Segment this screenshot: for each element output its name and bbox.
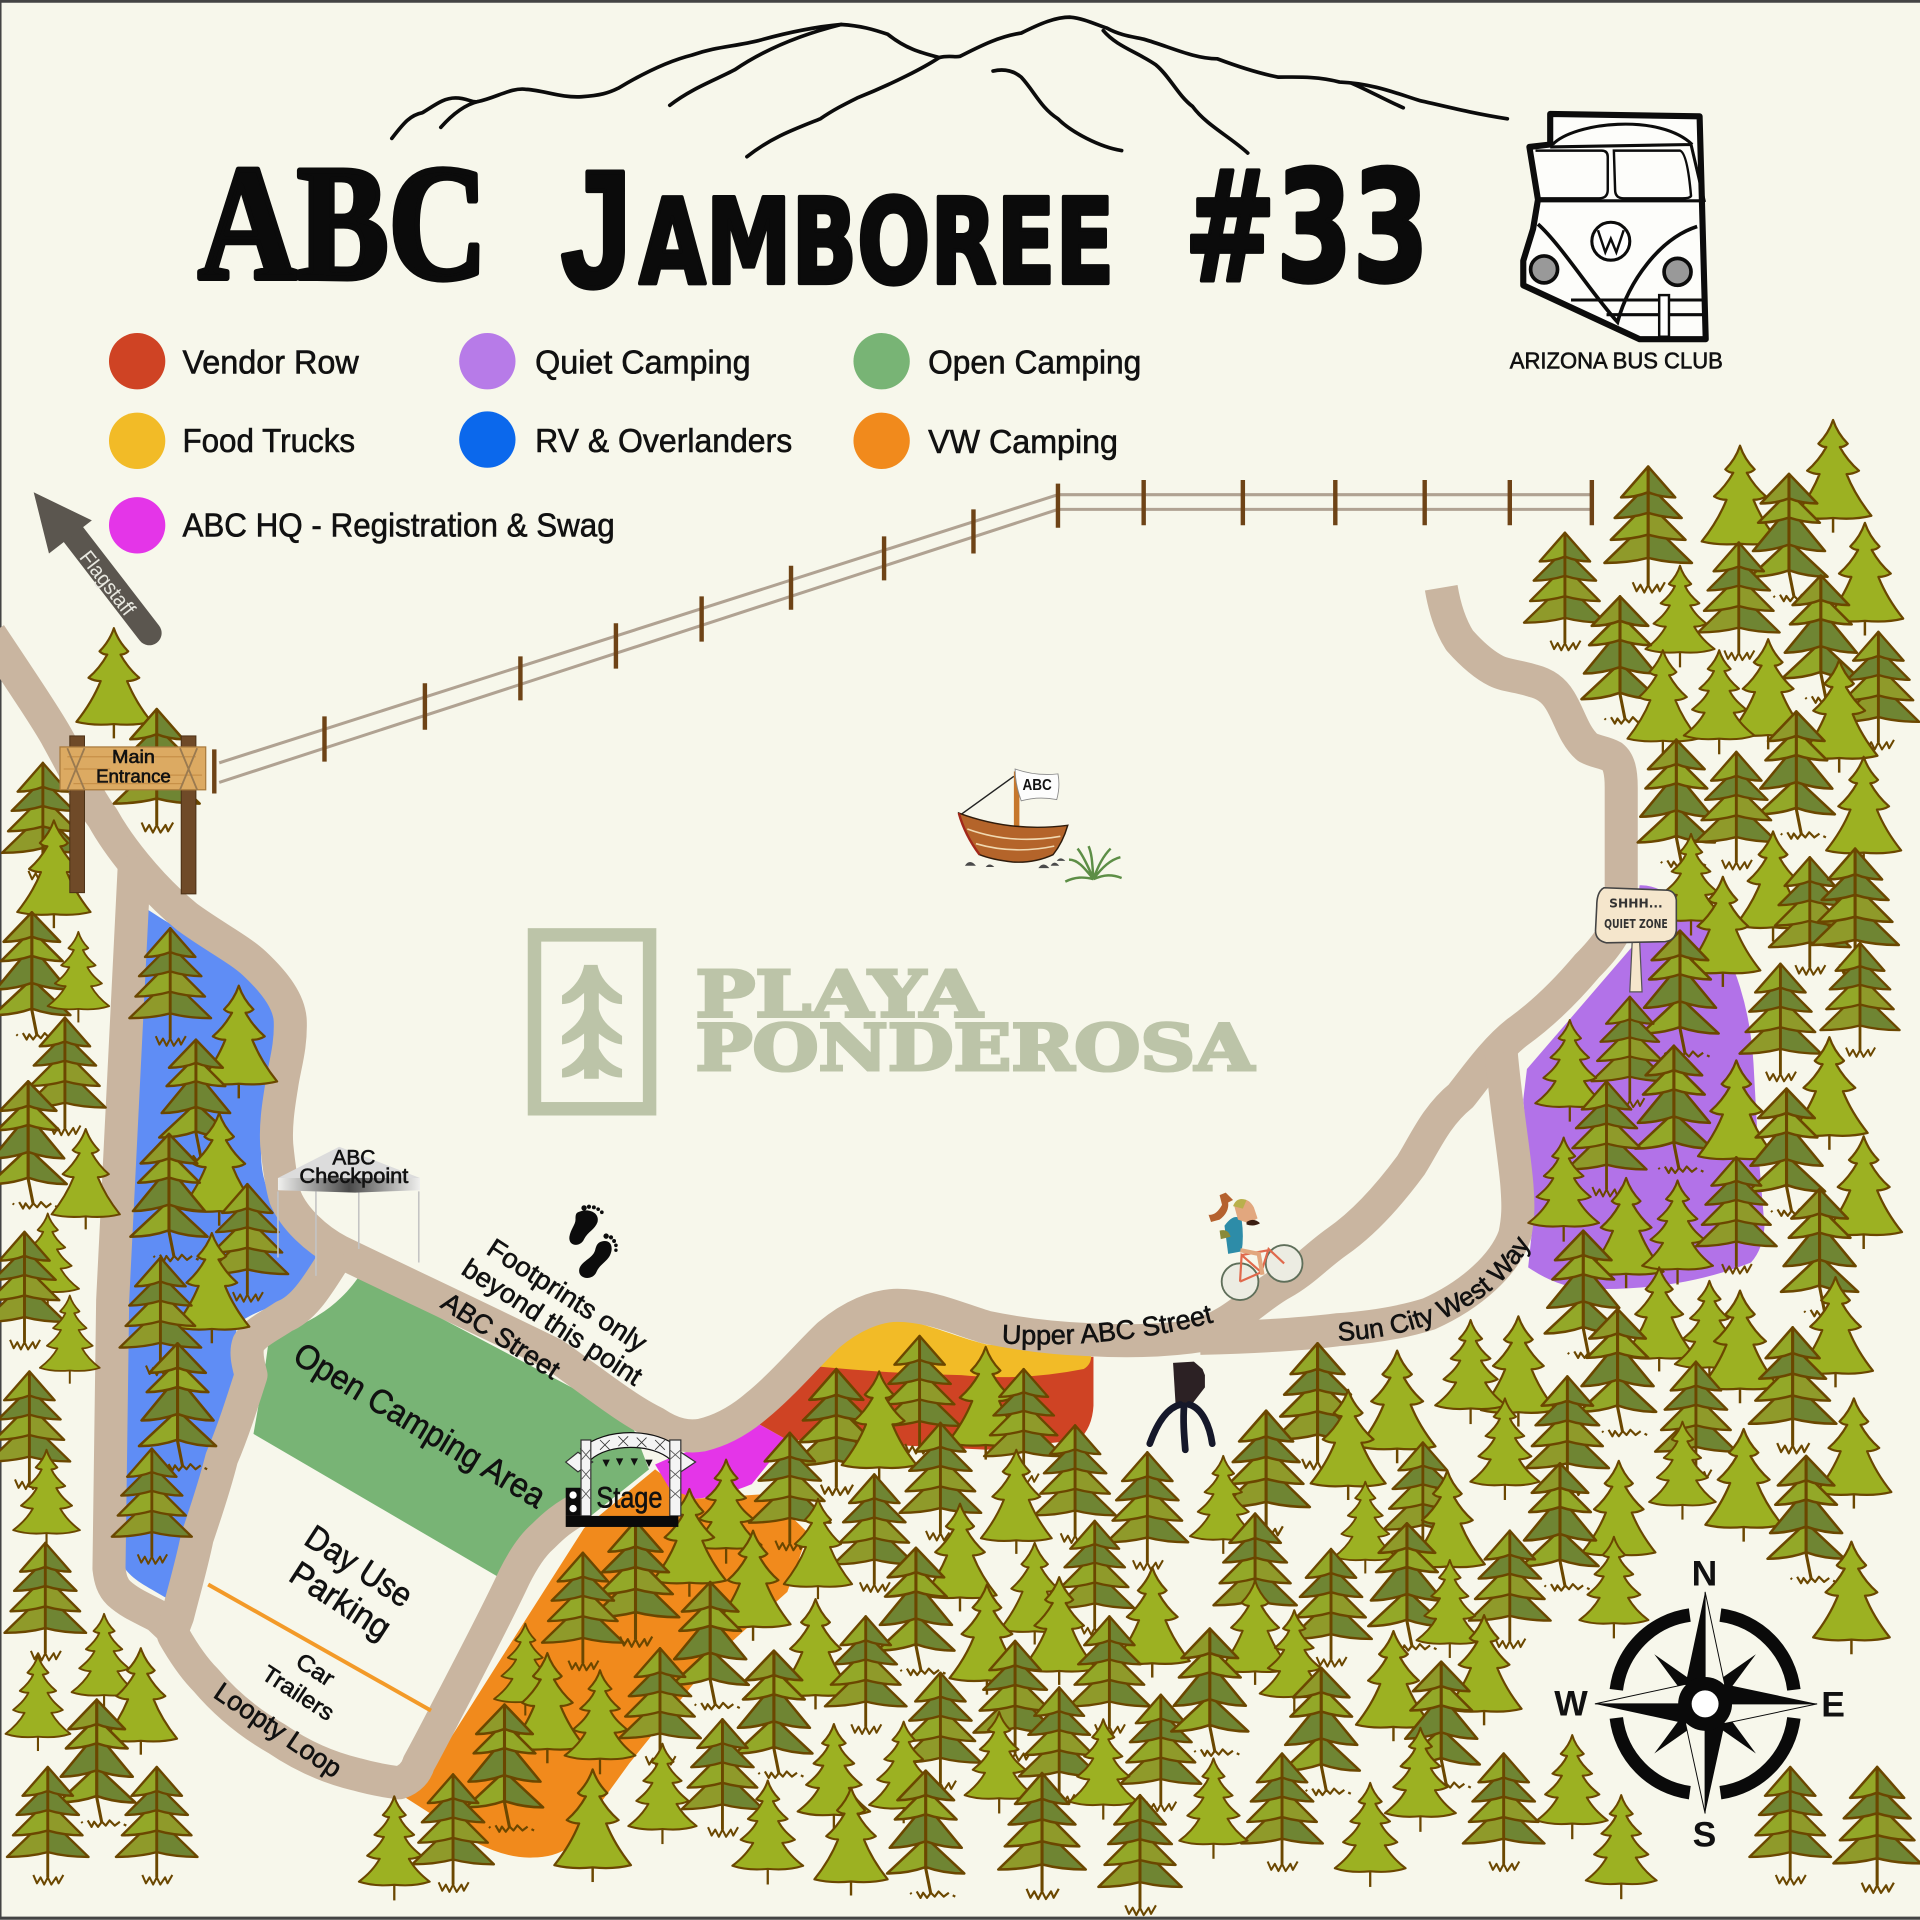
Arizona Bus Club logo bbox=[1510, 114, 1723, 374]
legend item: RV & Overlanders bbox=[459, 411, 792, 468]
label: Day Use Parking bbox=[283, 1518, 419, 1648]
legend item: Vendor Row bbox=[109, 333, 359, 389]
trees: west side bbox=[0, 628, 200, 1885]
title: #33 bbox=[1184, 139, 1429, 317]
icon: stage truss: Stage bbox=[596, 1481, 662, 1514]
road and area labels bbox=[209, 1233, 1531, 1784]
legend bbox=[109, 333, 1141, 553]
label: Car Trailers: Trailers bbox=[257, 1660, 339, 1726]
trees: south-east forest bbox=[1171, 1281, 1920, 1899]
roads bbox=[0, 588, 1621, 1783]
label: Sun City West Way: Sun City West Way bbox=[1338, 1236, 1531, 1341]
compass letters: S bbox=[1693, 1815, 1716, 1855]
zone: Open Camping Area bbox=[253, 1278, 649, 1582]
legend item: Quiet Camping bbox=[459, 333, 751, 389]
trees: VW camping and central forest bbox=[359, 1336, 1201, 1915]
label: ABC Street: ABC Street bbox=[436, 1286, 566, 1385]
dog bbox=[1209, 1193, 1233, 1222]
title: AMBOREE bbox=[639, 174, 1114, 311]
rider body bbox=[1224, 1217, 1243, 1254]
icon: ABC Checkpoint tent: ABC bbox=[332, 1146, 375, 1169]
logo wordmark bbox=[696, 957, 1256, 1086]
legend item: VW Camping: VW Camping bbox=[928, 424, 1118, 461]
zone: Vendor Row bbox=[757, 1357, 1093, 1450]
logo: Playa Ponderosa bbox=[534, 935, 1256, 1109]
sign: Shhh Quiet Zone: SHHH... bbox=[1609, 896, 1663, 910]
label: Footprints only beyond this point: Footprints only bbox=[482, 1233, 653, 1358]
compass letters: W bbox=[1554, 1684, 1588, 1724]
label: Footprints only beyond this point: beyond this point bbox=[457, 1253, 648, 1392]
logo frame with pine bbox=[534, 935, 650, 1109]
compass star bbox=[1595, 1592, 1817, 1813]
legend item: Open Camping: Open Camping bbox=[928, 344, 1141, 381]
arrow: to Flagstaff: Flagstaff bbox=[75, 546, 140, 621]
legend item: ABC HQ: ABC HQ - Registration & Swag bbox=[182, 507, 615, 544]
pebbles bbox=[965, 858, 1065, 868]
compass letters bbox=[1554, 1554, 1845, 1855]
road: Upper ABC to Quiet Zone bbox=[1194, 588, 1621, 1336]
zone: Food Trucks bbox=[818, 1319, 1091, 1377]
sign: Main Entrance: Entrance bbox=[96, 765, 171, 786]
icon: sailing boat with ABC flag: ABC bbox=[1022, 777, 1052, 794]
icon: sailing boat with ABC flag bbox=[959, 769, 1122, 882]
icon: footprints bbox=[569, 1205, 618, 1278]
legend item: Food Trucks: Food Trucks bbox=[182, 423, 355, 460]
icon: ABC Checkpoint tent bbox=[278, 1146, 420, 1276]
icon: desert grass bbox=[1065, 846, 1122, 882]
compass letters: N bbox=[1692, 1554, 1717, 1594]
road: main entry and ABC Street bbox=[0, 634, 1206, 1436]
legend item: Open Camping bbox=[853, 333, 1141, 389]
icon: cyclist with dog bbox=[1209, 1193, 1302, 1300]
parking divider: car trailers bbox=[208, 1584, 431, 1711]
label: Loopty Loop: Loopty Loop bbox=[209, 1677, 347, 1784]
zone: ABC HQ bbox=[655, 1423, 787, 1499]
label: Car Trailers: Car bbox=[291, 1648, 340, 1692]
sign: Shhh Quiet Zone: QUIET ZONE bbox=[1604, 917, 1668, 931]
zone: VW Camping bbox=[405, 1469, 808, 1858]
legend item: Vendor Row: Vendor Row bbox=[182, 344, 359, 381]
icon: ABC Checkpoint tent: Checkpoint bbox=[299, 1165, 409, 1188]
sign: Main Entrance: Main bbox=[112, 746, 155, 767]
legend item: Quiet Camping: Quiet Camping bbox=[535, 344, 751, 381]
logo wordmark: PLAYA bbox=[696, 957, 984, 1032]
zone: RV and Overlanders bbox=[125, 908, 328, 1600]
label: Upper ABC Street: Upper ABC Street bbox=[1004, 1306, 1214, 1350]
legend item: Food Trucks bbox=[109, 413, 355, 469]
legend item: ABC HQ bbox=[109, 497, 615, 553]
title: ABC bbox=[198, 133, 487, 314]
title bbox=[198, 133, 1429, 323]
compass ring bbox=[1616, 1615, 1794, 1793]
road: Loopty Loop bbox=[173, 1251, 585, 1783]
road: west lane bbox=[109, 857, 179, 1636]
fence bbox=[214, 480, 1592, 793]
title: J bbox=[561, 137, 632, 323]
label: Day Use Parking: Parking bbox=[283, 1554, 398, 1648]
compass rose bbox=[1554, 1554, 1845, 1855]
sign: Shhh Quiet Zone bbox=[1596, 888, 1676, 992]
trees: RV and Overlanders zone bbox=[112, 928, 288, 1564]
icon: stage truss bbox=[566, 1436, 696, 1527]
logo wordmark: PONDEROSA bbox=[696, 1011, 1256, 1086]
sign: Main Entrance bbox=[60, 736, 206, 894]
label: Day Use Parking: Day Use bbox=[298, 1518, 419, 1615]
legend item: VW Camping bbox=[853, 413, 1118, 469]
trees: north-east forest and quiet camping zone bbox=[1524, 420, 1919, 1387]
compass letters: E bbox=[1821, 1685, 1845, 1725]
zone: Quiet Camping bbox=[1523, 885, 1764, 1289]
legend item: RV & Overlanders: RV & Overlanders bbox=[535, 423, 792, 460]
mountain range line art bbox=[392, 17, 1507, 157]
icon: dark tripod figure bbox=[1150, 1362, 1212, 1450]
label: Open Camping Area: Open Camping Area bbox=[287, 1336, 553, 1516]
arrow: to Flagstaff bbox=[34, 492, 149, 633]
icon: VW bus in Arizona outline bbox=[1523, 114, 1706, 339]
club name: ARIZONA BUS CLUB bbox=[1510, 348, 1723, 374]
road: Sun City West Way bbox=[1200, 1053, 1518, 1338]
